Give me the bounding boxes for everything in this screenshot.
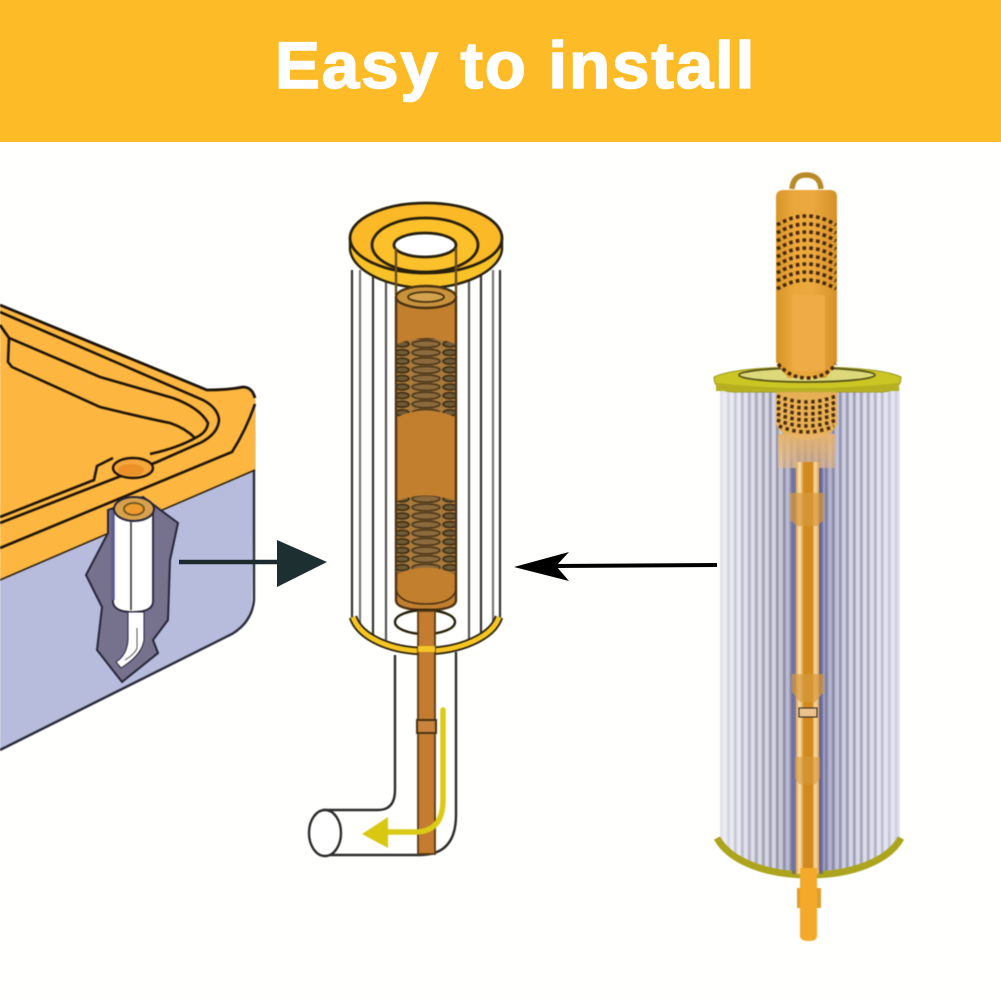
arrow: product to filter (514, 552, 717, 581)
mineral stick lower perforated section (776, 392, 837, 468)
mineral stick upper body (776, 175, 837, 378)
filter top cap (714, 367, 901, 392)
filter top cap (350, 203, 502, 295)
tub rim (0, 305, 255, 580)
arrow: tub to filter (179, 540, 327, 587)
perforation rows (777, 216, 836, 289)
upper perforated band (397, 338, 455, 417)
elbow opening (309, 810, 341, 856)
flow arrow (362, 710, 443, 848)
cut-away opening (86, 497, 178, 682)
product photo: filter with mineral stick (714, 175, 901, 941)
filter pleats (352, 270, 500, 640)
lower perforation arc (778, 364, 836, 378)
elbow pipe outline (323, 652, 456, 855)
title: Easy to install (275, 30, 754, 103)
stem bulge (792, 674, 824, 702)
filter bottom ring (353, 617, 499, 651)
header banner (0, 0, 1001, 142)
pleated filter body (720, 388, 900, 874)
stick bottom tip (797, 868, 821, 941)
drain hole (113, 458, 153, 478)
stem bulge (795, 757, 820, 784)
filter bottom cap (717, 838, 901, 875)
hanging loop (792, 175, 821, 189)
stem bulge (790, 493, 824, 526)
label panel on stick (792, 295, 825, 371)
stem (790, 462, 824, 874)
stem joint (799, 708, 817, 717)
hot tub corner illustration (0, 305, 255, 750)
rim contour lines (0, 312, 255, 548)
inner cartridge (396, 286, 456, 610)
filter cutaway diagram (309, 203, 502, 856)
tub side wall (0, 470, 254, 750)
lower perforated band (397, 496, 455, 574)
center stem (417, 611, 436, 854)
stem sides dark (792, 468, 823, 874)
cut-away filter (113, 497, 154, 668)
filter bottom opening (395, 610, 455, 634)
